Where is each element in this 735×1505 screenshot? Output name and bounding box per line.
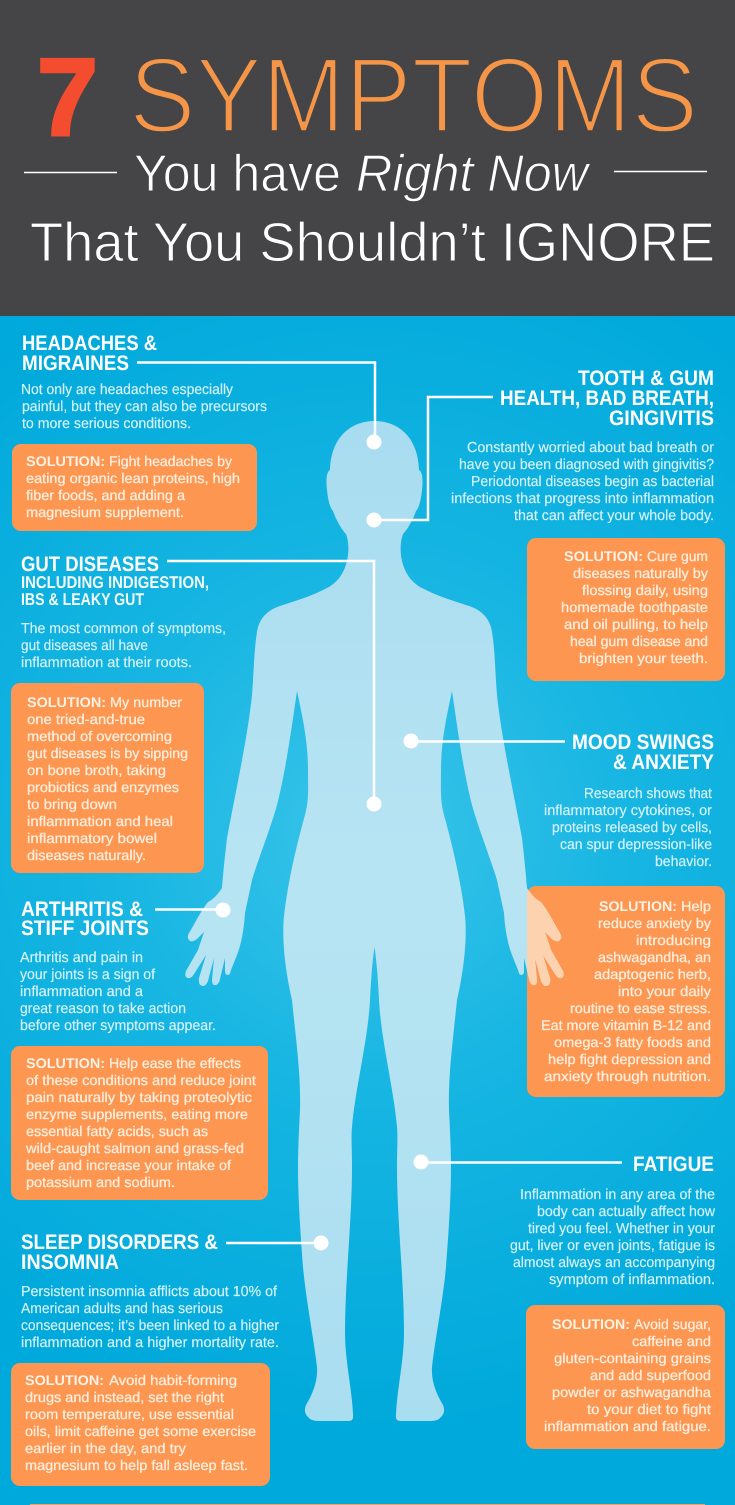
connector: fatigue bbox=[414, 1154, 622, 1170]
description: can spur depression-like bbox=[560, 837, 712, 853]
description: great reason to take action bbox=[20, 1001, 186, 1017]
solution box bbox=[526, 1305, 725, 1449]
description: have you been diagnosed with gingivitis? bbox=[459, 457, 714, 473]
solution box: pain naturally by taking proteolytic bbox=[26, 1089, 252, 1105]
description: inflammation and a higher mortality rate. bbox=[21, 1335, 279, 1351]
solution box: of these conditions and reduce joint bbox=[26, 1072, 256, 1088]
solution box bbox=[527, 538, 725, 681]
solution box bbox=[527, 886, 725, 1097]
solution box: inflammatory bowel bbox=[27, 830, 157, 846]
header panel bbox=[0, 0, 735, 316]
heading: FATIGUE bbox=[633, 1153, 714, 1176]
solution box: essential fatty acids, such as bbox=[26, 1123, 208, 1139]
solution box: help fight depression and bbox=[548, 1051, 711, 1067]
panel: arthritis and stiff joints bbox=[11, 898, 268, 1200]
solution box: Cure gum bbox=[647, 548, 708, 564]
heading bbox=[22, 332, 157, 375]
description: Research shows that bbox=[584, 786, 712, 802]
solution box: diseases naturally. bbox=[27, 847, 146, 863]
solution box: oils, limit caffeine get some exercise bbox=[25, 1423, 256, 1439]
solution box: drugs and instead, set the right bbox=[25, 1389, 224, 1405]
description: inflammation at their roots. bbox=[21, 655, 192, 671]
subtitle: You have Right Now: You have bbox=[134, 145, 341, 203]
description bbox=[21, 1284, 279, 1351]
body silhouette bbox=[185, 421, 564, 1421]
description: proteins released by cells, bbox=[552, 820, 712, 836]
solution box: routine to ease stress. bbox=[570, 1000, 711, 1016]
solution box: Fight headaches by bbox=[109, 453, 232, 469]
subtitle: You have Right Now: Right Now bbox=[356, 145, 591, 203]
description: almost always an accompanying bbox=[513, 1255, 715, 1271]
solution box: and oil pulling, to help bbox=[564, 616, 708, 632]
solution box: SOLUTION: bbox=[564, 548, 643, 564]
description: Not only are headaches especially bbox=[21, 382, 234, 398]
solution box: beef and increase your intake of bbox=[26, 1157, 231, 1173]
solution box: anxiety through nutrition. bbox=[544, 1068, 711, 1084]
solution box bbox=[11, 1046, 268, 1200]
solution box bbox=[12, 444, 257, 531]
title: SYMPTOMS: SYMPTOMS bbox=[129, 35, 698, 155]
heading: & ANXIETY bbox=[613, 751, 714, 774]
solution box: SOLUTION: bbox=[552, 1316, 630, 1332]
panel: fatigue bbox=[510, 1153, 725, 1449]
description: to more serious conditions. bbox=[22, 416, 191, 432]
subtitle: You have Right Now bbox=[24, 145, 707, 203]
solution box: SOLUTION: bbox=[25, 1372, 104, 1388]
solution box: gluten-containing grains bbox=[554, 1350, 711, 1366]
solution box: inflammation and fatigue. bbox=[544, 1418, 711, 1434]
solution box: heal gum disease and bbox=[570, 633, 708, 649]
solution box: magnesium supplement. bbox=[26, 504, 184, 520]
solution box: SOLUTION: bbox=[26, 453, 105, 469]
solution box: My number bbox=[110, 694, 182, 710]
heading: STIFF JOINTS bbox=[21, 917, 149, 940]
description: body can actually affect how bbox=[537, 1204, 716, 1220]
solution box: Help ease the effects bbox=[109, 1055, 241, 1071]
heading: HEALTH, BAD BREATH, bbox=[500, 387, 714, 410]
description bbox=[451, 440, 714, 524]
description bbox=[20, 950, 216, 1034]
connector: arthritis bbox=[155, 902, 230, 918]
description bbox=[510, 1187, 716, 1288]
solution box: wild-caught salmon and grass-fed bbox=[25, 1140, 244, 1156]
solution box: fiber foods, and adding a bbox=[26, 487, 185, 503]
heading: HEADACHES & bbox=[22, 332, 157, 355]
panel: tooth and gum health bbox=[451, 367, 725, 681]
bottom orange strip bbox=[30, 1504, 705, 1505]
solution box bbox=[11, 683, 204, 873]
blue background bbox=[0, 316, 735, 1505]
description: symptom of inflammation. bbox=[549, 1272, 715, 1288]
solution box: SOLUTION: bbox=[27, 694, 106, 710]
solution box: Avoid habit-forming bbox=[109, 1372, 237, 1388]
solution box: reduce anxiety by bbox=[598, 915, 711, 931]
solution box: introducing bbox=[636, 932, 711, 948]
solution box: Avoid sugar, bbox=[634, 1316, 711, 1332]
description: before other symptoms appear. bbox=[20, 1018, 216, 1034]
description: American adults and has serious bbox=[21, 1301, 223, 1317]
solution box bbox=[11, 1363, 270, 1486]
heading bbox=[572, 731, 714, 774]
solution box: probiotics and enzymes bbox=[27, 779, 179, 795]
heading bbox=[21, 553, 209, 609]
panel: gut diseases bbox=[11, 553, 226, 873]
heading: IBS & LEAKY GUT bbox=[21, 590, 145, 609]
heading: ARTHRITIS & bbox=[21, 898, 143, 921]
description: Periodontal diseases begin as bacterial bbox=[471, 474, 714, 490]
panel: headaches and migraines bbox=[12, 332, 267, 531]
solution box: homemade toothpaste bbox=[561, 599, 708, 615]
heading bbox=[21, 1231, 218, 1274]
solution box: diseases naturally by bbox=[573, 565, 708, 581]
subtitle: That You Shouldn't IGNORE: That You Shouldn’t IGNORE bbox=[30, 211, 715, 273]
description: Persistent insomnia afflicts about 10% of bbox=[21, 1284, 278, 1300]
description: inflammation and a bbox=[20, 984, 144, 1000]
description: infections that progress into inflammation bbox=[451, 491, 714, 507]
description: painful, but they can also be precursors bbox=[22, 399, 267, 415]
heading: INSOMNIA bbox=[21, 1251, 119, 1274]
solution box: into your daily bbox=[618, 983, 711, 999]
solution box: room temperature, use essential bbox=[25, 1406, 234, 1422]
description: tired you feel. Whether in your bbox=[528, 1221, 715, 1237]
solution box: adaptogenic herb, bbox=[594, 966, 711, 982]
title: 7: 7 bbox=[37, 36, 98, 159]
heading: INCLUDING INDIGESTION, bbox=[21, 573, 209, 592]
heading: MIGRAINES bbox=[22, 352, 129, 375]
description: your joints is a sign of bbox=[20, 967, 156, 983]
solution box: earlier in the day, and try bbox=[25, 1440, 186, 1456]
description: Constantly worried about bad breath or bbox=[467, 440, 714, 456]
solution box: flossing daily, using bbox=[582, 582, 708, 598]
solution box: eating organic lean proteins, high bbox=[26, 470, 240, 486]
solution box: caffeine and bbox=[632, 1333, 711, 1349]
heading: TOOTH & GUM bbox=[578, 367, 714, 390]
solution box: SOLUTION: bbox=[26, 1055, 105, 1071]
connector: mood swings bbox=[404, 734, 565, 748]
heading bbox=[21, 898, 149, 940]
solution box: to bring down bbox=[27, 796, 117, 812]
description: The most common of symptoms, bbox=[21, 621, 226, 637]
connector: gut diseases bbox=[167, 561, 382, 812]
solution box: to your diet to fight bbox=[587, 1401, 711, 1417]
connector: sleep disorders bbox=[226, 1236, 328, 1250]
description: inflammatory cytokines, or bbox=[544, 803, 712, 819]
solution box: enzyme supplements, eating more bbox=[26, 1106, 248, 1122]
solution box: brighten your teeth. bbox=[579, 650, 708, 666]
description: behavior. bbox=[655, 854, 712, 870]
description: that can affect your whole body. bbox=[514, 508, 714, 524]
panel: sleep disorders and insomnia bbox=[11, 1231, 279, 1486]
solution box: Help bbox=[681, 898, 711, 914]
description: Arthritis and pain in bbox=[20, 950, 143, 966]
description: gut diseases all have bbox=[21, 638, 148, 654]
description: Inflammation in any area of the bbox=[520, 1187, 715, 1203]
description bbox=[21, 621, 226, 671]
heading: MOOD SWINGS bbox=[572, 731, 714, 754]
description bbox=[21, 382, 267, 432]
solution box: SOLUTION: bbox=[599, 898, 677, 914]
panel: mood swings and anxiety bbox=[527, 731, 725, 1097]
solution box: Eat more vitamin B-12 and bbox=[541, 1017, 711, 1033]
solution box: and add superfood bbox=[590, 1367, 711, 1383]
solution box: one tried-and-true bbox=[27, 711, 145, 727]
solution box: potassium and sodium. bbox=[26, 1174, 175, 1190]
heading bbox=[500, 367, 714, 430]
solution box: on bone broth, taking bbox=[27, 762, 166, 778]
solution box: powder or ashwagandha bbox=[552, 1384, 711, 1400]
solution box: method of overcoming bbox=[27, 728, 172, 744]
solution box: magnesium to help fall asleep fast. bbox=[25, 1457, 248, 1473]
heading: GUT DISEASES bbox=[21, 553, 159, 576]
solution box: inflammation and heal bbox=[27, 813, 173, 829]
solution box: ashwagandha, an bbox=[598, 949, 711, 965]
solution box: gut diseases is by sipping bbox=[27, 745, 188, 761]
connector: tooth and gum bbox=[366, 397, 493, 528]
solution box: omega-3 fatty foods and bbox=[554, 1034, 711, 1050]
heading: GINGIVITIS bbox=[609, 407, 714, 430]
description: gut, liver or even joints, fatigue is bbox=[510, 1238, 715, 1254]
description bbox=[544, 786, 712, 870]
description: consequences; it’s been linked to a higher bbox=[21, 1318, 279, 1334]
connector: headaches bbox=[137, 362, 382, 450]
heading: SLEEP DISORDERS & bbox=[21, 1231, 218, 1254]
